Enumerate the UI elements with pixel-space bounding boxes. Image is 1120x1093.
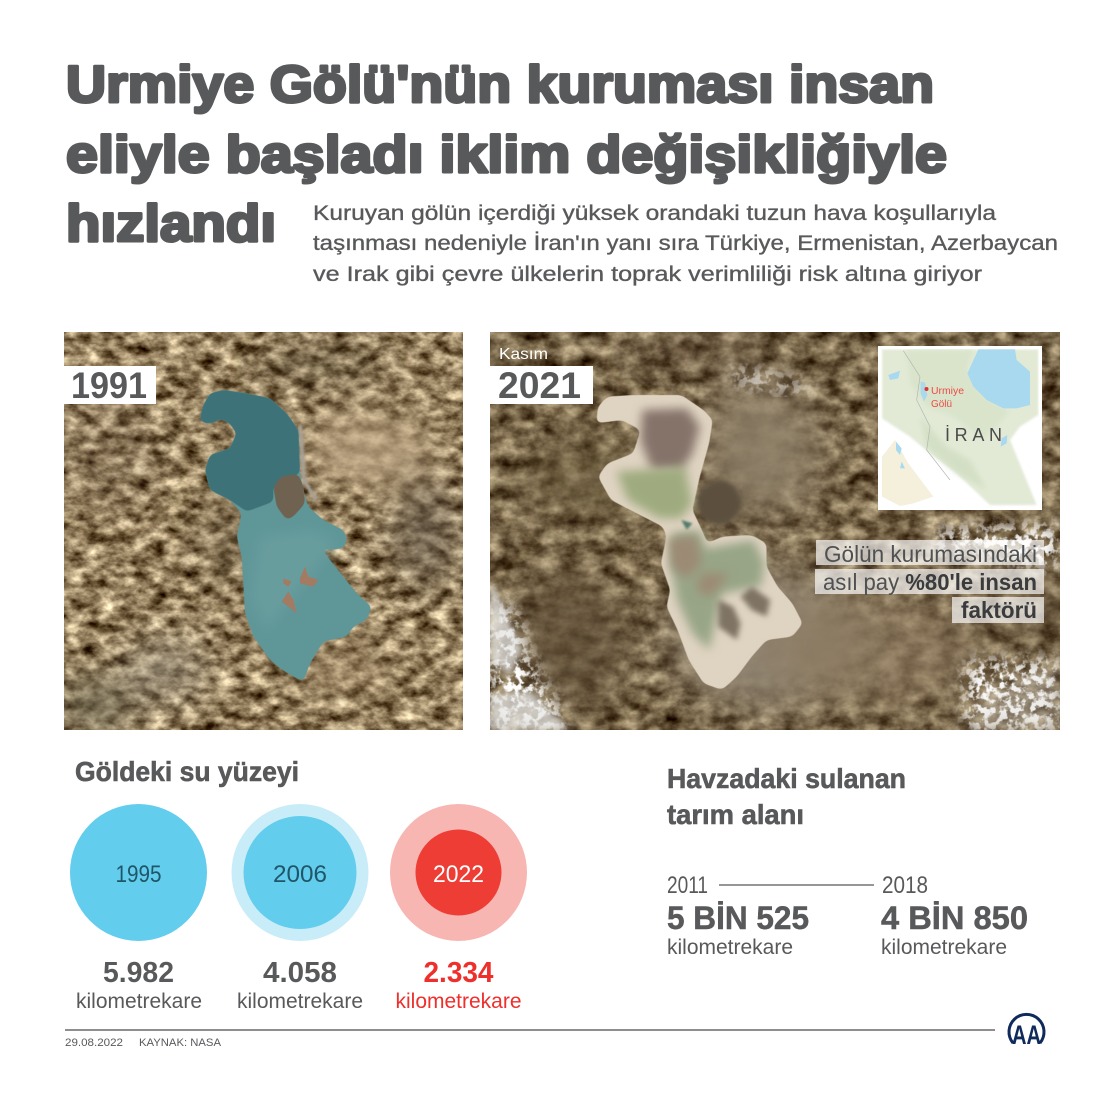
salt islands xyxy=(718,587,770,640)
inset map: Iran: Gölü xyxy=(931,399,952,410)
volcanic island patch xyxy=(696,480,742,526)
circle: 2022 xyxy=(390,804,527,1013)
title xyxy=(66,56,947,253)
stat: 2018: 4 BİN 850 xyxy=(881,900,1028,936)
source line: 29.08.2022 xyxy=(65,1037,123,1049)
circle: 2006: 2006 xyxy=(273,861,327,888)
footer rule xyxy=(65,1029,995,1031)
title: Urmiye Gölü'nün kuruması insan xyxy=(66,56,934,114)
circle: 2006 xyxy=(232,804,368,1013)
stat: 2011: 2011 xyxy=(667,872,708,899)
heading: Göldeki su yüzeyi: Göldeki su yüzeyi xyxy=(75,756,299,787)
circle: 1995 xyxy=(70,804,207,1013)
circle: 2006: 4.058 xyxy=(263,957,337,989)
small lakes xyxy=(888,371,1007,468)
title: hızlandı xyxy=(66,195,276,253)
inset map: Iran xyxy=(878,346,1042,510)
stat: 2011: 5 BİN 525 xyxy=(667,900,809,936)
shoreline light xyxy=(300,425,316,500)
logo: AA xyxy=(1009,1014,1044,1050)
connector line xyxy=(719,884,874,886)
label: Kasım: Kasım xyxy=(499,346,548,363)
stat: 2011 xyxy=(667,872,809,959)
clouds xyxy=(490,600,570,730)
source line: KAYNAK: NASA xyxy=(139,1037,222,1049)
subtitle text: taşınması nedeniyle İran'ın yanı sıra Türkiye, Ermenistan, Azerbaycan xyxy=(313,232,1058,255)
callout: asıl pay %80'le insan xyxy=(823,569,1037,595)
circle: 2022: 2022 xyxy=(433,861,484,888)
callout xyxy=(815,540,1044,623)
stat: 2018: kilometrekare xyxy=(881,936,1007,959)
subtitle text: Kuruyan gölün içerdiği yüksek orandaki tuzun hava koşullarıyla xyxy=(313,202,996,225)
circle: 1995: 1995 xyxy=(116,861,162,888)
panel: 1991 satellite image xyxy=(55,332,463,733)
subtitle text xyxy=(313,202,1058,286)
circle: 2022: 2.334 xyxy=(424,957,494,989)
inset map: Iran: Urmiye xyxy=(931,386,964,397)
title: eliyle başladı iklim değişikliğiyle xyxy=(66,126,947,184)
label: 2021: 2021 xyxy=(498,365,581,406)
lake: 1991 xyxy=(200,390,372,682)
source line xyxy=(65,1037,222,1049)
heading: Havzadaki sulanan tarım alanı xyxy=(667,763,906,830)
subtitle text: ve Irak gibi çevre ülkelerin toprak verimliliği risk altına giriyor xyxy=(313,263,982,286)
circle: 2022: kilometrekare xyxy=(396,990,522,1013)
callout: faktörü xyxy=(961,597,1037,623)
stat: 2018: 2018 xyxy=(882,872,928,899)
callout: Gölün kurumasındaki xyxy=(824,541,1037,567)
Caspian Sea xyxy=(967,349,1030,408)
island xyxy=(273,474,305,520)
circle: 1995: 5.982 xyxy=(103,957,174,989)
circle: 1995: kilometrekare xyxy=(76,990,202,1013)
heading: Havzadaki sulanan tarım alanı: tarım alanı xyxy=(667,799,804,830)
Urmiye Gölü marker xyxy=(924,387,928,391)
inset map: Iran: İRAN xyxy=(945,425,1002,445)
circle: 2006: kilometrekare xyxy=(237,990,363,1013)
panel: 2021 satellite image xyxy=(490,332,1070,730)
heading: Havzadaki sulanan tarım alanı: Havzadaki sulanan xyxy=(667,763,906,794)
stat: 2018 xyxy=(881,872,1028,959)
logo: AA: AA xyxy=(1012,1020,1041,1050)
lake: 2021 dried xyxy=(596,395,803,690)
label: 1991: 1991 xyxy=(71,365,147,406)
stat: 2011: kilometrekare xyxy=(667,936,793,959)
